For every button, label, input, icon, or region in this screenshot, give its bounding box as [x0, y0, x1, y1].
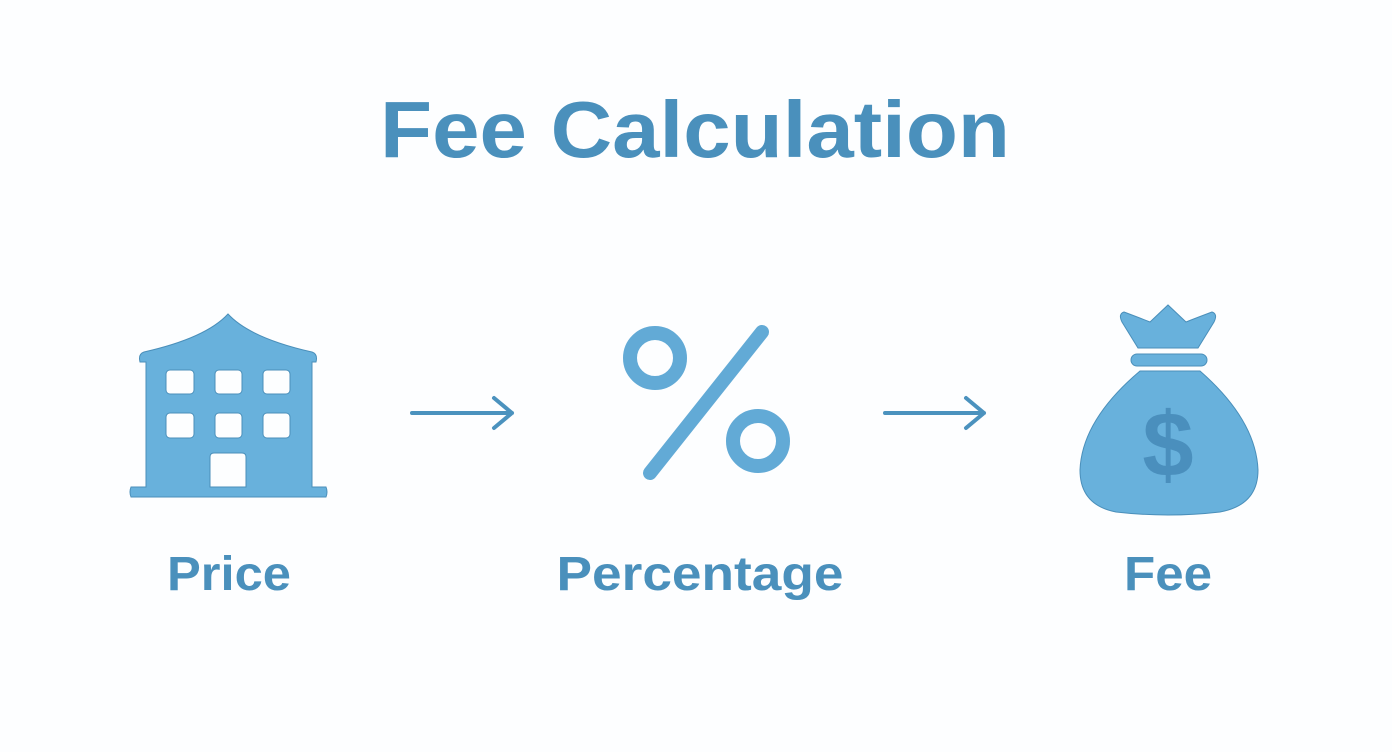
- icon: money bag: $: [1142, 394, 1194, 496]
- arrow 2: [885, 398, 984, 428]
- icon: building: [130, 314, 327, 497]
- title: Fee Calculation: [380, 85, 1010, 174]
- label: Fee: Fee: [1124, 548, 1212, 601]
- label: Price: Price: [167, 548, 291, 601]
- label: Percentage: Percentage: [556, 548, 844, 601]
- arrow 1: [412, 398, 512, 428]
- icon: percent: [630, 332, 783, 473]
- icon: money bag: [1080, 305, 1258, 515]
